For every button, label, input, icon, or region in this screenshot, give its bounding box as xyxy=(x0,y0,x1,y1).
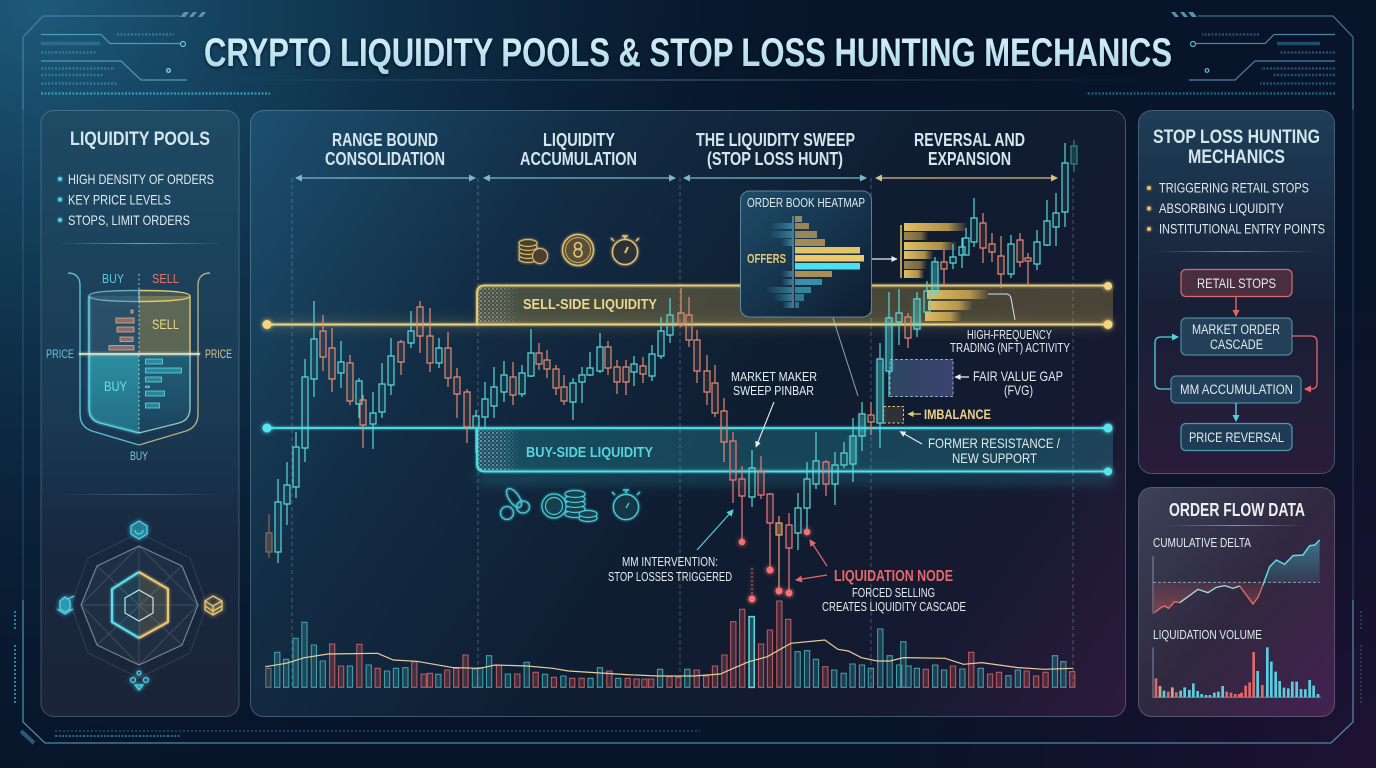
line: heatmap to reversal xyxy=(833,318,858,396)
liquidation node callout: CREATES LIQUIDITY CASCADE xyxy=(822,600,966,614)
market maker pinbar callout: SWEEP PINBAR xyxy=(733,384,814,398)
order book heatmap callout: ORDER BOOK HEATMAP xyxy=(747,195,865,210)
phase heading: reversal and expansion: REVERSAL AND xyxy=(914,130,1025,150)
bullet list: pool properties xyxy=(58,171,214,228)
panel: liquidity pools xyxy=(41,110,239,716)
phase heading: range bound consolidation: CONSOLIDATION xyxy=(325,149,445,169)
order book heatmap callout xyxy=(740,191,872,317)
flow box: price reversal xyxy=(1181,424,1292,450)
candles: first dim candle xyxy=(266,514,272,558)
diagram: liquidity beaker: SELL xyxy=(152,316,179,332)
header circuit decoration: left xyxy=(41,34,270,94)
candle: pinbar body xyxy=(776,516,782,590)
icon: right node xyxy=(205,596,222,615)
chart: liquidation volume bars xyxy=(1153,647,1321,697)
flow arrow: accumulation to reversal xyxy=(1235,403,1237,421)
diagram: liquidity beaker: BUY xyxy=(102,271,124,286)
volume moving average line xyxy=(265,640,1073,676)
candles: glow of breakout xyxy=(853,262,935,464)
phase heading: reversal and expansion: EXPANSION xyxy=(928,149,1011,169)
liquidation nodes xyxy=(739,529,810,602)
imbalance label: IMBALANCE xyxy=(924,406,991,422)
panel: stop loss hunting mechanics xyxy=(1138,110,1334,474)
liquidation node callout: LIQUIDATION NODE xyxy=(834,568,953,585)
arrow: heatmap to chart xyxy=(872,258,897,260)
former resistance callout: NEW SUPPORT xyxy=(952,450,1037,466)
chart: cumulative delta line xyxy=(1153,540,1320,614)
heading: stop loss hunting mechanics xyxy=(1153,127,1320,168)
flow box: mm accumulation: MM ACCUMULATION xyxy=(1180,382,1293,397)
diagram: liquidity beaker: BUY xyxy=(104,378,128,394)
heading: liquidity pools: LIQUIDITY POOLS xyxy=(70,129,210,150)
flow arrow: accumulation to cascade xyxy=(1155,337,1178,389)
candles: bearish range xyxy=(320,213,1031,462)
phase heading: liquidity accumulation: LIQUIDITY xyxy=(543,130,615,150)
icon: gold coin xyxy=(562,234,594,266)
chart label: cumulative delta: CUMULATIVE DELTA xyxy=(1153,536,1252,550)
former resistance callout: FORMER RESISTANCE / xyxy=(928,435,1060,451)
volume bars: bullish xyxy=(275,622,1066,687)
flow box: price reversal: PRICE REVERSAL xyxy=(1189,430,1284,445)
bullet list: hunting mechanics xyxy=(1147,180,1325,236)
band: sell-side liquidity xyxy=(262,282,1113,329)
bullet list: pool properties: KEY PRICE LEVELS xyxy=(68,192,171,208)
heading: order flow data: ORDER FLOW DATA xyxy=(1169,500,1305,520)
callout: high-frequency trading: TRADING (NFT) ACTIVITY xyxy=(950,341,1071,355)
icon: top node xyxy=(131,521,147,539)
band: sell-side liquidity: SELL-SIDE LIQUIDITY xyxy=(523,296,657,313)
phase heading: liquidity accumulation xyxy=(520,130,637,169)
diagram: liquidity beaker xyxy=(46,271,232,463)
flow arrow: cascade to accumulation xyxy=(1292,336,1317,389)
flow box: mm accumulation xyxy=(1171,376,1301,403)
fair value gap label: (FVG) xyxy=(1004,382,1033,398)
callout: high-frequency trading: HIGH-FREQUENCY xyxy=(967,328,1052,342)
band: buy-side liquidity: BUY-SIDE LIQUIDITY xyxy=(526,444,653,461)
candles: bullish xyxy=(275,143,1068,563)
MM intervention callout xyxy=(608,510,733,584)
bullet list: pool properties: STOPS, LIMIT ORDERS xyxy=(68,212,190,228)
heading: stop loss hunting mechanics: STOP LOSS HUNTING xyxy=(1153,127,1320,148)
heading: stop loss hunting mechanics: MECHANICS xyxy=(1188,147,1285,168)
bullet list: pool properties: HIGH DENSITY OF ORDERS xyxy=(68,171,214,187)
candlestick chart xyxy=(266,140,1077,602)
diagram: liquidity beaker: SELL xyxy=(152,271,179,286)
volume chart xyxy=(265,601,1075,687)
band: buy-side liquidity xyxy=(262,424,1113,484)
flow box: market order cascade xyxy=(1181,318,1292,355)
flow box: market order cascade: CASCADE xyxy=(1210,337,1263,352)
imbalance label xyxy=(908,406,991,422)
icon: left node xyxy=(57,596,74,614)
icon: gold coin stack xyxy=(519,240,548,264)
radar diagram xyxy=(57,521,222,690)
order book heatmap callout: OFFERS xyxy=(747,252,786,266)
diagram: liquidity beaker: PRICE xyxy=(205,347,232,361)
phase heading: range bound consolidation: RANGE BOUND xyxy=(332,130,438,150)
candles: last dim candle xyxy=(1071,140,1077,172)
header circuit decoration: right xyxy=(1086,34,1335,94)
icon: gold stopwatch xyxy=(611,236,639,264)
flow box: market order cascade: MARKET ORDER xyxy=(1192,322,1280,337)
icon: cyan coin stack xyxy=(542,490,597,522)
imbalance box xyxy=(884,406,904,423)
panel: order flow data xyxy=(1138,488,1334,716)
icon: bottom node xyxy=(130,671,148,690)
phase heading: reversal and expansion xyxy=(914,130,1025,169)
volume bars: bearish xyxy=(330,601,1075,687)
flow arrow: retail to cascade xyxy=(1235,297,1237,316)
bullet list: hunting mechanics: TRIGGERING RETAIL STOPS xyxy=(1159,180,1309,196)
volume bars: dim and highlight xyxy=(266,617,754,687)
bullet list: hunting mechanics: INSTITUTIONAL ENTRY POINTS xyxy=(1159,222,1325,236)
diagram: liquidity beaker: PRICE xyxy=(46,347,74,361)
phase heading: range bound consolidation xyxy=(325,130,445,169)
callout: high-frequency trading xyxy=(950,294,1071,355)
diagram: liquidity beaker: BUY xyxy=(130,449,148,463)
phase span arrows xyxy=(296,177,1057,179)
order bars: offers ladder xyxy=(901,223,967,278)
liquidation node callout: FORCED SELLING xyxy=(852,586,935,600)
chart label: liquidation volume: LIQUIDATION VOLUME xyxy=(1153,628,1262,642)
phase heading: the liquidity sweep: (STOP LOSS HUNT) xyxy=(707,149,843,169)
MM intervention callout: MM INTERVENTION: xyxy=(622,555,718,569)
bullet list: hunting mechanics: ABSORBING LIQUIDITY xyxy=(1159,201,1284,216)
panel: main price chart xyxy=(250,110,1126,716)
liquidation node callout xyxy=(796,540,966,614)
flow box: retail stops xyxy=(1181,270,1292,296)
icon: cyan stopwatch xyxy=(612,490,640,520)
flow box: retail stops: RETAIL STOPS xyxy=(1197,276,1276,291)
phase heading: the liquidity sweep: THE LIQUIDITY SWEEP xyxy=(696,130,855,150)
market maker pinbar callout: MARKET MAKER xyxy=(731,370,817,384)
phase dividers xyxy=(292,178,1073,688)
candles: sweep stop hunt xyxy=(730,432,829,592)
fair value gap label xyxy=(955,368,1063,398)
icon: cyan chain links xyxy=(500,486,530,520)
former resistance callout xyxy=(900,432,1060,466)
flowchart: stop loss cascade xyxy=(1155,270,1317,450)
fair value gap box xyxy=(890,360,953,396)
phase heading: the liquidity sweep xyxy=(696,130,855,169)
fair value gap label: FAIR VALUE GAP xyxy=(973,368,1063,384)
market maker pinbar callout xyxy=(731,370,817,447)
phase heading: liquidity accumulation: ACCUMULATION xyxy=(520,149,637,169)
order bars: high-frequency trading xyxy=(925,290,988,321)
MM intervention callout: STOP LOSSES TRIGGERED xyxy=(608,570,732,584)
